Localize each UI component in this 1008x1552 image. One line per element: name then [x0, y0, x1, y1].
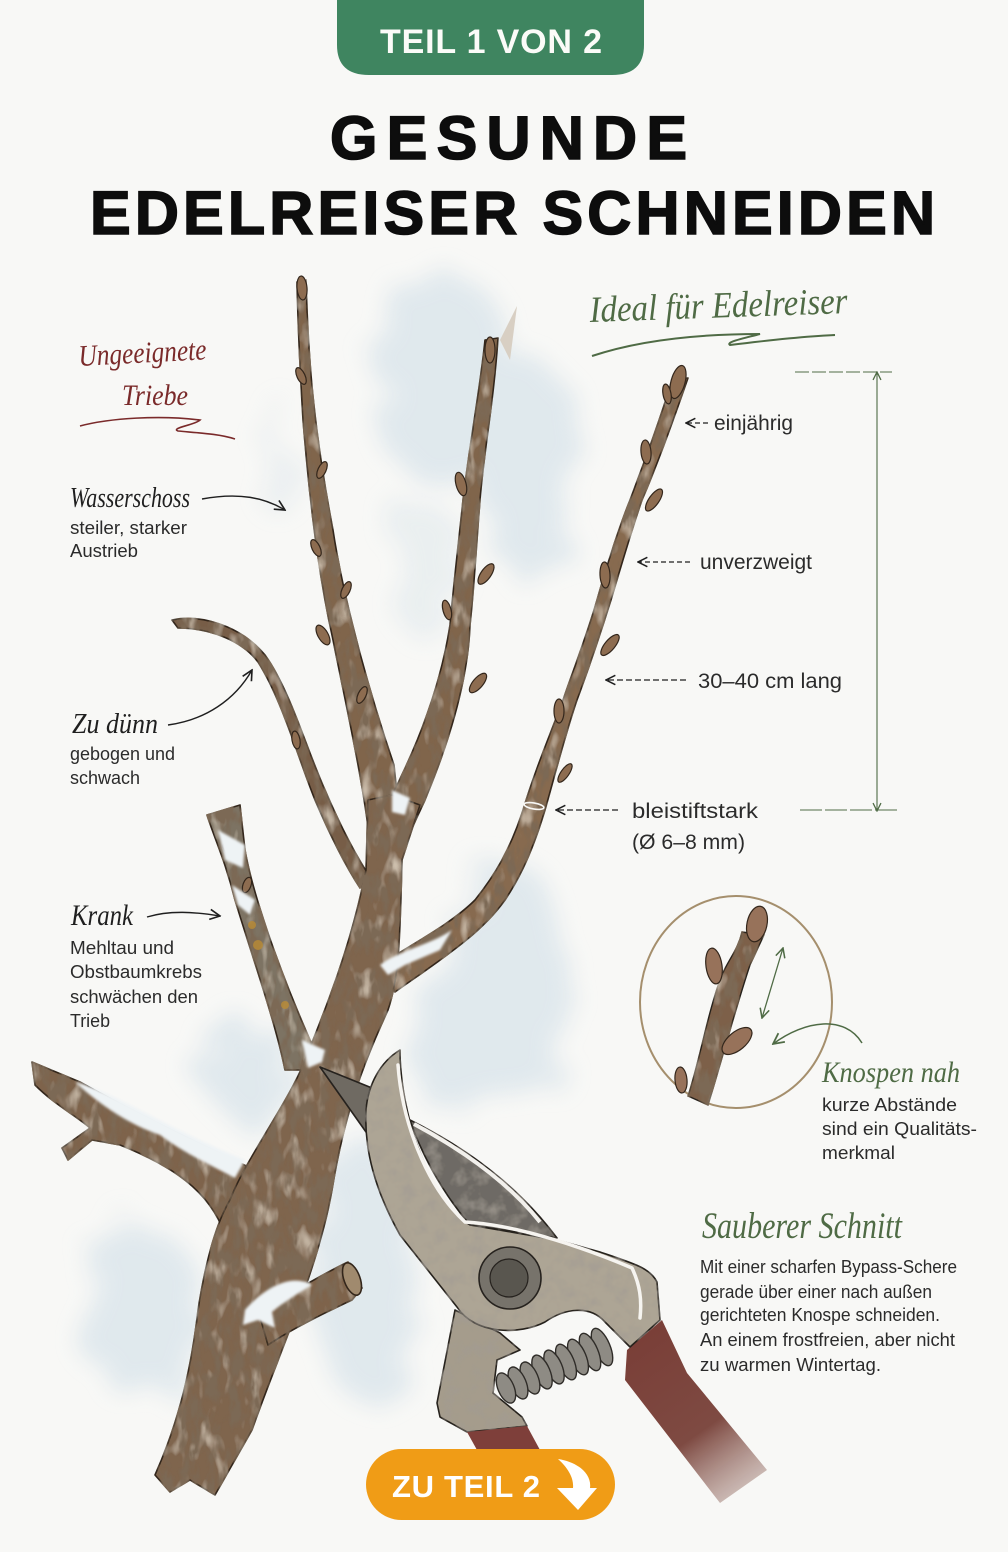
pruning shears: [320, 1050, 767, 1503]
heading: Ungeeignete Triebe: [78, 333, 235, 439]
callout: Knospen nah: sind ein Qualitäts-: [822, 1119, 977, 1139]
callout: Wasserschoss: Austrieb: [70, 541, 138, 561]
callout: Knospen nah: merkmal: [822, 1143, 895, 1163]
dark cutting blade: [410, 1120, 557, 1238]
heading: Ideal für Edelreiser: [588, 281, 849, 356]
lower red grip: [467, 1426, 540, 1450]
label: bleistiftstark: (Ø 6–8 mm): [632, 831, 745, 854]
callout: Wasserschoss: Wasserschoss: [70, 483, 190, 514]
branch: cut stub: [258, 1260, 365, 1345]
label: bleistiftstark: bleistiftstark: [632, 800, 759, 823]
dimension line: length of scion: [795, 372, 897, 811]
callout: Krank: Mehltau und: [70, 938, 174, 958]
branch: middle shoot: [392, 306, 517, 850]
watercolor sky washes: [80, 275, 580, 1400]
callout: Wasserschoss: [70, 483, 285, 561]
trunk: [155, 795, 420, 1495]
text block: Sauberer Schnitt: gerade über einer nach außen: [700, 1282, 932, 1302]
top tab: Teil 1 von 2: [337, 0, 644, 75]
blade highlight: [398, 1065, 641, 1318]
spacing arrow: [762, 948, 783, 1018]
callout: Zu dünn: Zu dünn: [72, 709, 158, 740]
callout: Zu dünn: gebogen und: [70, 744, 175, 764]
lichen spots on diseased shoot: [248, 921, 289, 1009]
label: bleistiftstark: [556, 800, 759, 854]
upper hook blade and body: [366, 1050, 660, 1347]
label: 30–40 cm lang: 30–40 cm lang: [698, 670, 842, 693]
text block: Sauberer Schnitt: zu warmen Wintertag.: [700, 1355, 881, 1375]
thickness ring on scion: [524, 801, 544, 811]
pivot bolt: [479, 1247, 541, 1309]
icon: curved down arrow: [557, 1459, 597, 1510]
spring: [492, 1325, 617, 1406]
callout: Krank: Trieb: [70, 1011, 110, 1031]
text block: Sauberer Schnitt: Sauberer Schnitt: [702, 1206, 903, 1247]
branch: diseased shoot: [207, 805, 325, 1070]
button: Zu Teil 2: [366, 1449, 615, 1520]
callout: Zu dünn: [70, 670, 252, 788]
text block: Sauberer Schnitt: Mit einer scharfen Bypass-Schere: [700, 1257, 957, 1277]
label: einjährig: einjährig: [714, 412, 793, 435]
callout: Krank: Krank: [70, 899, 134, 932]
top tab: Teil 1 von 2: TEIL 1 VON 2: [380, 23, 602, 61]
inset twig: [688, 932, 764, 1105]
callout: Knospen nah: kurze Abstände: [822, 1095, 957, 1115]
label: unverzweigt: unverzweigt: [700, 551, 812, 574]
callout: Wasserschoss: steiler, starker: [70, 518, 187, 538]
callout: Knospen nah: Knospen nah: [821, 1056, 960, 1089]
branch: lower left limb: [32, 1062, 255, 1235]
text block: Sauberer Schnitt: gerichteten Knospe schneiden.: [700, 1305, 940, 1325]
inset: bud detail circle: [640, 896, 832, 1108]
right red handle: [625, 1320, 767, 1503]
callout: Krank: Obstbaumkrebs: [70, 962, 202, 982]
title: [90, 104, 935, 247]
illustration: branch structure: [32, 280, 688, 1495]
heading: Ideal für Edelreiser: Ideal für Edelreiser: [588, 281, 849, 331]
callout: Knospen nah: [773, 1024, 977, 1163]
button: Zu Teil 2: ZU TEIL 2: [392, 1469, 540, 1504]
counter blade tip: [320, 1067, 372, 1132]
buds on branches: [221, 276, 689, 894]
lower handle: [437, 1310, 527, 1432]
heading: Ungeeignete Triebe: Triebe: [122, 379, 188, 412]
branch: thin bent shoot: [172, 618, 372, 888]
callout: Zu dünn: schwach: [70, 768, 140, 788]
branch: ideal scion: [380, 378, 688, 992]
title: GESUNDE: [330, 104, 687, 172]
title: EDELREISER SCHNEIDEN: [90, 179, 935, 247]
callout: Krank: [70, 899, 220, 1031]
callout: Krank: schwächen den: [70, 987, 198, 1007]
snow patches: [75, 790, 452, 1328]
inset buds: [674, 904, 771, 1093]
text block: Sauberer Schnitt: [700, 1206, 957, 1375]
text block: Sauberer Schnitt: An einem frostfreien, aber nicht: [700, 1330, 955, 1350]
branch: Wasserschoss: [297, 280, 402, 845]
heading: Ungeeignete Triebe: Ungeeignete: [78, 333, 207, 373]
